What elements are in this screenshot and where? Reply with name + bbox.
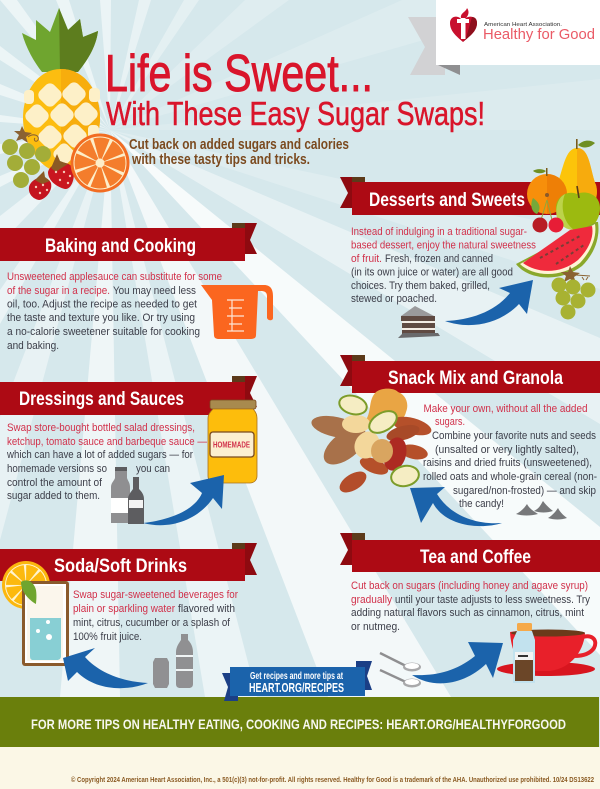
icon: homemade jar <box>208 400 257 483</box>
text: desserts: (in its own juice or water) are all good <box>351 266 513 278</box>
logo panel <box>436 0 600 65</box>
icon: soda can and bottle <box>153 634 193 688</box>
section: tea and coffee <box>340 533 600 688</box>
text: tea and coffee: Cut back on sugars (including honey and agave syrup) <box>351 580 588 592</box>
banner: dressings and sauces <box>0 376 257 415</box>
text: baking: of the sugar in a recipe. <box>7 285 110 297</box>
section: dressings and sauces <box>0 376 257 525</box>
section: snack mix and granola <box>309 355 600 526</box>
text: snack mix: (unsalted or very lightly salted), <box>435 444 579 456</box>
text: baking: and baking. <box>7 340 59 352</box>
banner: soda and soft drinks: Soda/Soft Drinks <box>54 556 187 577</box>
subtitle: Cut back on added sugars and calories <box>129 137 349 153</box>
text: dressings: which can have a lot of added sugars — for <box>6 449 193 461</box>
text: desserts: Fresh, frozen and canned <box>385 253 493 265</box>
text: baking <box>7 271 222 352</box>
section: desserts and sweets <box>340 139 600 338</box>
banner: tea and coffee <box>340 533 600 572</box>
banner: dressings and sauces: Dressings and Sauces <box>19 389 184 410</box>
icon: lemon slice <box>2 561 50 609</box>
banner: snack mix and granola <box>340 355 600 393</box>
icon: homemade jar: HOMEMADE <box>213 440 250 450</box>
text: desserts: Instead of indulging in a traditional sugar- <box>351 226 527 238</box>
title <box>105 45 485 132</box>
text: soda: 100% fruit juice. <box>73 631 142 643</box>
section: baking and cooking <box>0 223 273 352</box>
text: snack mix: the candy! <box>459 498 504 510</box>
logo panel: American Heart Association. <box>484 22 562 28</box>
banner: desserts and sweets <box>340 177 600 215</box>
icon: grapes <box>2 126 51 188</box>
title: Life is Sweet... <box>105 45 373 103</box>
icon: flavoring bottle <box>513 623 535 683</box>
icon: chocolate chips <box>516 501 567 520</box>
banner: soda and soft drinks <box>0 543 257 581</box>
banner: tea and coffee: Tea and Coffee <box>420 547 531 568</box>
text: desserts: based dessert, enjoy the natural sweetness <box>351 240 536 252</box>
text: tea and coffee: or nutmeg. <box>351 621 400 633</box>
text: dressings <box>6 422 207 502</box>
arrow: soda to water <box>63 648 148 688</box>
text: baking: the taste and texture you like. Or try using <box>7 312 195 324</box>
text: dressings: sugar added to them. <box>7 490 100 502</box>
text: dressings: homemade versions so <box>7 463 107 475</box>
icon: grapes and vine <box>552 266 596 320</box>
subtitle: with these tasty tips and tricks. <box>131 152 310 168</box>
copyright strip <box>0 747 600 789</box>
icon: glass of water <box>21 580 69 666</box>
callout: recipes banner: HEART.ORG/RECIPES <box>249 681 344 695</box>
logo panel: Healthy for Good <box>483 26 595 43</box>
text: soda <box>73 589 238 643</box>
text: baking: Unsweetened applesauce can substitute for some <box>7 271 222 283</box>
icon: spoons with sugar <box>380 653 421 688</box>
text: desserts: choices. Try them baked, grilled, <box>351 280 490 292</box>
icon: store-bought bottles <box>111 467 144 524</box>
callout: recipes banner: Get recipes and more tips at <box>250 671 343 682</box>
banner: desserts and sweets: Desserts and Sweets <box>369 190 525 211</box>
section: soda and soft drinks <box>0 543 257 688</box>
text: snack mix <box>423 403 597 510</box>
text: baking: a no-calorie sweetener suitable for cooking <box>7 326 200 338</box>
icon: orange slice <box>70 134 130 192</box>
text: desserts: of fruit. <box>351 253 382 265</box>
arrow: bottles to jar <box>143 475 224 525</box>
text: dressings: Swap store-bought bottled salad dressings, <box>7 422 195 434</box>
arrow: candy to nuts <box>410 487 502 526</box>
icon: coffee cup <box>497 630 595 676</box>
text: dressings: control the amount of <box>7 477 102 489</box>
icon: nuts and seeds <box>309 389 433 497</box>
text: soda: flavored with <box>178 603 235 615</box>
banner: snack mix and granola: Snack Mix and Granola <box>388 368 563 389</box>
text: tea and coffee: gradually <box>351 594 393 606</box>
text: tea and coffee <box>351 580 591 633</box>
icon: fruit group <box>516 139 600 277</box>
icon: pineapple <box>22 8 100 172</box>
footer band <box>0 697 600 747</box>
text: baking: You may need less <box>113 285 196 297</box>
icon: measuring cup <box>201 285 273 339</box>
arrow: spoons to cup <box>412 642 503 683</box>
icon: cake <box>398 306 440 338</box>
text: desserts: stewed or poached. <box>351 293 437 305</box>
text: snack mix: raisins and dried fruits (unsweetened), <box>423 457 592 469</box>
icon: strawberries <box>29 154 74 200</box>
subtitle <box>129 137 349 168</box>
ribbon: grey logo ribbon <box>408 17 460 75</box>
arrow: cake to fruit <box>445 280 533 325</box>
banner: baking and cooking: Baking and Cooking <box>45 236 196 257</box>
text: soda: mint, citrus, cucumber or a splash of <box>73 617 230 629</box>
banner: baking and cooking <box>0 223 257 261</box>
text: snack mix: Make your own, without all the added <box>424 403 588 415</box>
text: desserts <box>351 226 536 305</box>
text: soda: plain or sparkling water <box>73 603 175 615</box>
text: dressings: ketchup, tomato sauce and barbeque sauce — <box>7 436 207 448</box>
callout: recipes banner <box>222 661 372 701</box>
title: With These Easy Sugar Swaps! <box>106 95 485 132</box>
text: snack mix: sugars. <box>435 416 465 428</box>
text: soda: Swap sugar-sweetened beverages for <box>73 589 238 601</box>
text: baking: oil, too. Adjust the recipe as needed to get <box>7 298 197 310</box>
text: dressings: you can <box>136 463 170 475</box>
text: tea and coffee: adding natural flavors such as cinnamon, citrus, mint <box>351 607 584 619</box>
